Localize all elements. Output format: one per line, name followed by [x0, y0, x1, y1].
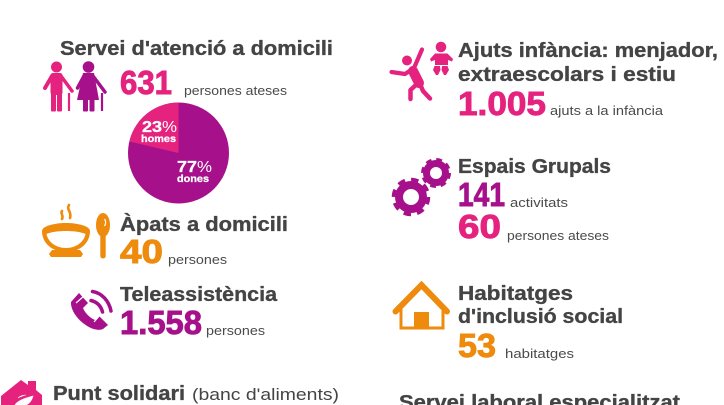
panel: Punt solidari [1, 380, 339, 405]
panel: Servei d'atenció a domicili [45, 38, 333, 204]
icon: gears [394, 160, 450, 214]
heading: Servei d'atenció a domicili: Servei d'atenció a domicili [60, 38, 333, 60]
heading: extraescolars i estiu: extraescolars i estiu [458, 64, 676, 86]
heading: d'inclusió social: d'inclusió social [458, 306, 623, 328]
number: 60: 60 [458, 208, 501, 245]
pie chart: homes and dones [128, 102, 229, 204]
heading: Habitatges: Habitatges [458, 283, 573, 305]
heading: Punt solidari: Punt solidari [53, 383, 185, 405]
panel: Teleassistència [71, 284, 278, 341]
label: ajuts a la infància: ajuts a la infància [550, 103, 664, 118]
number: 40: 40 [120, 233, 163, 270]
label: persones ateses: persones ateses [184, 83, 288, 98]
pie chart: homes and dones: % [197, 159, 212, 176]
pie chart: homes and dones: dones [177, 173, 209, 185]
panel: Àpats a domicili [42, 205, 288, 270]
heading: Teleassistència: Teleassistència [120, 284, 278, 306]
panel: Habitatges d'inclusió social [396, 283, 623, 364]
icon: child and baby [392, 42, 453, 99]
icon: soup bowl and spoon [42, 205, 110, 258]
pie chart: homes and dones: 77 [177, 159, 197, 176]
pie chart: homes and dones: % [162, 119, 177, 136]
number: 141: 141 [458, 176, 505, 213]
label: activitats: activitats [510, 195, 569, 210]
icon: house [396, 285, 447, 328]
number: 53: 53 [458, 327, 496, 364]
note: banc d'aliments: (banc d'aliments) [192, 385, 339, 404]
heading: Ajuts infància: Ajuts infància: menjador, [458, 40, 718, 62]
panel: Ajuts infància [392, 40, 718, 122]
number: 1.558: 1.558 [120, 304, 202, 341]
label: persones: persones [168, 252, 228, 267]
heading: Espais Grupals: Espais Grupals [458, 156, 611, 178]
label: persones ateses: persones ateses [507, 228, 610, 243]
pie chart: homes and dones: 23 [142, 119, 162, 136]
number: 1.005: 1.005 [458, 85, 546, 122]
panel: Espais Grupals [394, 156, 611, 245]
icon: house with bread [1, 380, 42, 405]
pie chart: homes and dones: homes [141, 133, 176, 145]
label: persones: persones [206, 323, 266, 338]
number: 631: 631 [120, 64, 172, 101]
icon: elderly couple [45, 61, 105, 112]
label: habitatges: habitatges [505, 346, 575, 361]
heading: Àpats a domicili: Àpats a domicili [120, 213, 288, 236]
icon: telephone [71, 292, 111, 330]
